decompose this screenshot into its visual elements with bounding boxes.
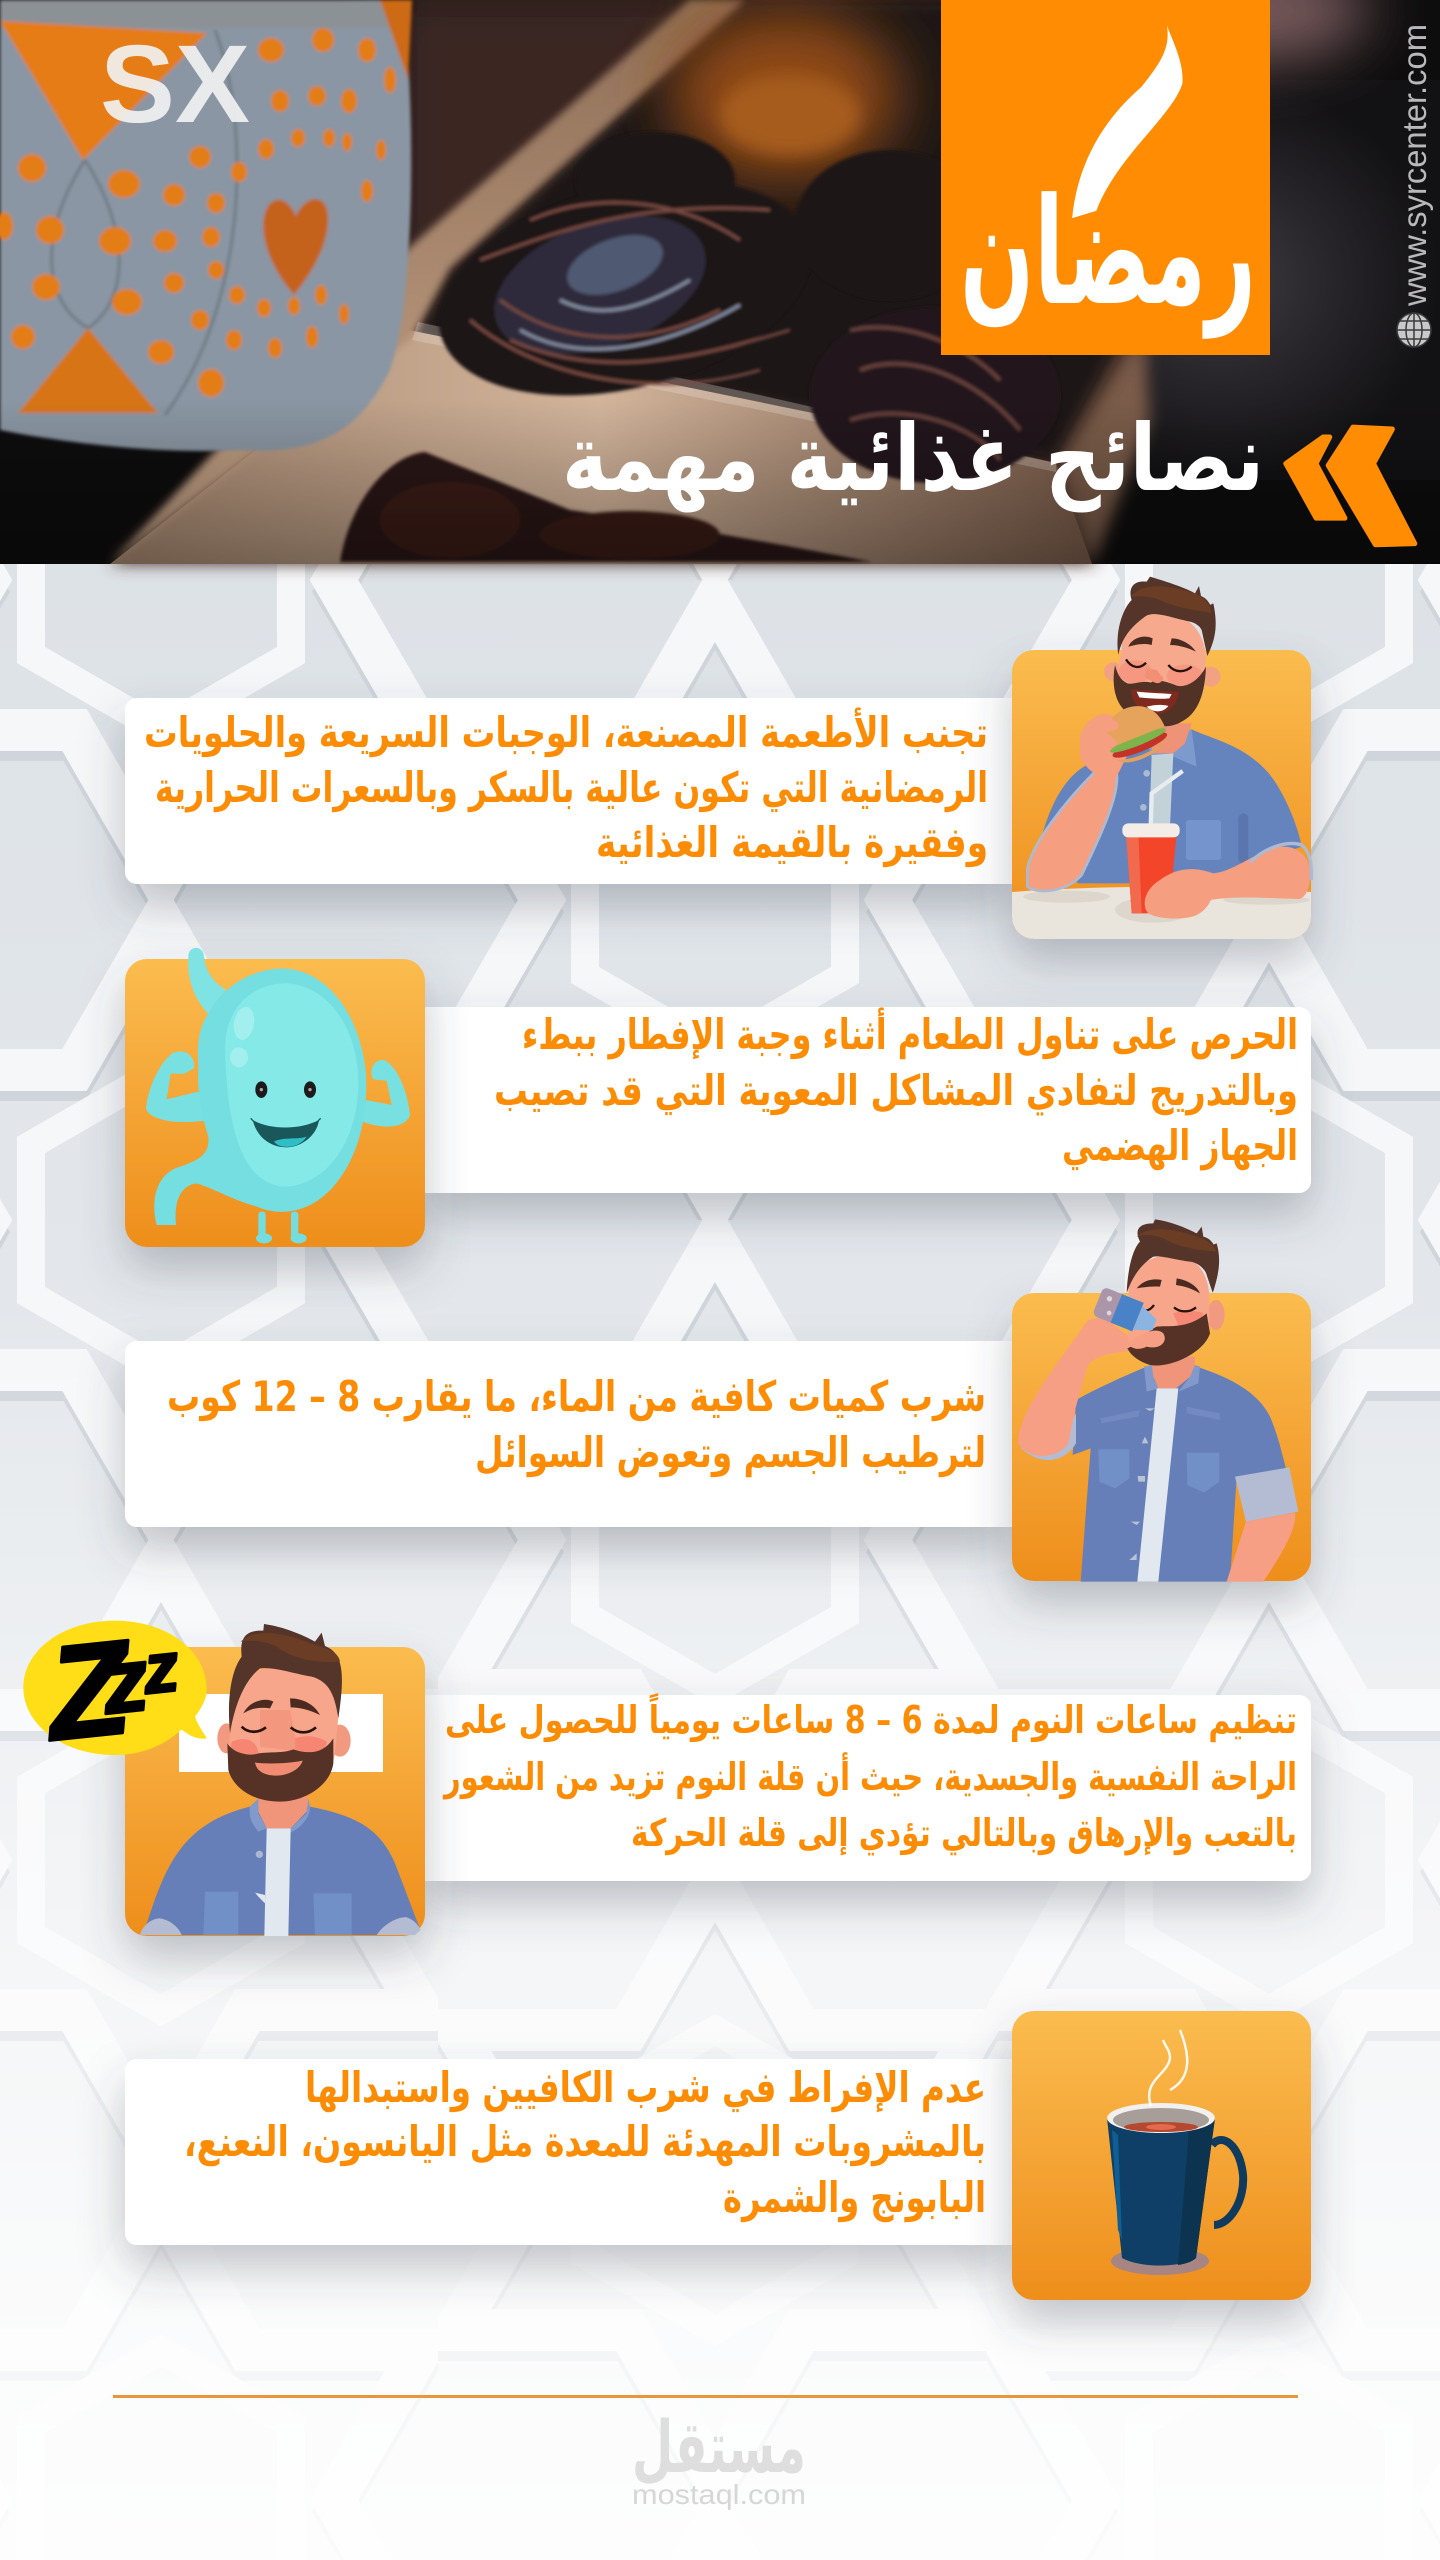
icon: chevrons: [1286, 427, 1415, 545]
patterned background: [0, 564, 1440, 2560]
tip 3 text: لترطيب الجسم وتعوض السوائل: [475, 1428, 986, 1478]
tip 5 text: [184, 2063, 986, 2223]
text card 1: [125, 698, 1012, 884]
text card 4: [425, 1695, 1311, 1881]
man drinking water: [1018, 1219, 1298, 1582]
man sleeping: [140, 1624, 421, 1936]
head: [1207, 1300, 1225, 1330]
straw: [1151, 771, 1183, 828]
divider line: [113, 2395, 1298, 2398]
raised arm: [1019, 1413, 1076, 1460]
icon: mug with steam: [1107, 2030, 1243, 2275]
shirt: [1039, 729, 1302, 883]
Ramadan word: رمضان: [960, 166, 1256, 339]
bottle: [1092, 1287, 1161, 1338]
Ramadan logo panel: [941, 0, 1270, 355]
tip 1 text: تجنب الأطعمة المصنعة، الوجبات السريعة والحلويات: [144, 707, 988, 758]
neck: [1152, 1357, 1195, 1388]
tip 1 text: [144, 707, 988, 868]
text card 3: [125, 1341, 1012, 1527]
panel: tip 5 limit caffeine: [125, 2011, 1311, 2300]
neck: [1152, 723, 1192, 753]
image card 3: [1012, 1293, 1311, 1581]
right arm and hand: [1210, 847, 1310, 900]
tip 1 text: وفقيرة بالقيمة الغذائية: [596, 818, 988, 868]
mostaql url: mostaql.com: [632, 2479, 806, 2510]
stomach character: [146, 948, 410, 1243]
fingers: [1127, 1331, 1165, 1349]
footer logo: [632, 2405, 806, 2510]
tee: [1137, 1388, 1178, 1582]
raised arm: [1027, 772, 1117, 891]
tip 4 text: تنظيم ساعات النوم لمدة 6 – 8 ساعات يومياً للحصول على: [445, 1693, 1297, 1743]
neck: [258, 1797, 308, 1828]
tip 3 text: [167, 1372, 986, 1478]
tip 1 text: الرمضانية التي تكون عالية بالسكر وبالسعرات الحرارية: [155, 763, 988, 813]
ceramic tray: [110, 0, 1150, 564]
tip 2 text: الجهاز الهضمي: [1062, 1121, 1298, 1171]
image card 5: [1012, 2011, 1311, 2300]
Zzz text: z: [97, 1630, 153, 1734]
panel: tip 4 sleep: [23, 1607, 1311, 1936]
tip 4 text: [442, 1693, 1297, 1856]
red cup: [1126, 833, 1177, 913]
shirt: [1073, 1367, 1287, 1582]
tip 2 text: [494, 1007, 1298, 1171]
arm cuff: [1235, 1467, 1298, 1522]
mostaql arabic wordmark: مستقل: [632, 2405, 806, 2489]
title: نصائح غذائية مهمة: [562, 405, 1264, 513]
tip 5 text: عدم الإفراط في شرب الكافيين واستبدالها: [305, 2063, 986, 2113]
website url: www.syrcenter.com: [1396, 24, 1433, 307]
tee: [1149, 753, 1173, 827]
lantern: [0, 0, 412, 451]
image card 4: [125, 1647, 425, 1936]
tip 5 text: البابونج والشمرة: [723, 2173, 986, 2223]
icon: globe: [1397, 313, 1431, 347]
calligraphic flourish: [1072, 25, 1183, 218]
burger: [1097, 697, 1173, 769]
SX logo: SX: [100, 23, 250, 146]
raisins: [340, 452, 872, 562]
tip 3 text: شرب كميات كافية من الماء، ما يقارب 8 – 12 كوب: [167, 1372, 986, 1422]
table: [1012, 887, 1311, 939]
text card 2: [425, 1007, 1311, 1193]
header photo: lantern and dates: [0, 0, 1440, 564]
white panel behind head: [179, 1694, 383, 1772]
Zzz text: z: [138, 1627, 182, 1709]
fingers: [1080, 717, 1119, 761]
shirt: [142, 1807, 419, 1935]
head: [1104, 662, 1123, 681]
text card 5: [125, 2059, 1012, 2245]
tee: [264, 1828, 291, 1936]
panel: tip 2 eat slowly: [125, 948, 1311, 1247]
tip 5 text: بالمشروبات المهدئة للمعدة مثل اليانسون، النعنع،: [184, 2117, 986, 2167]
man eating burger: [1023, 577, 1311, 923]
image card 2: [125, 959, 425, 1247]
almonds: [670, 10, 900, 180]
panel: tip 3 drink water: [125, 1219, 1311, 1582]
speech bubble Zzz: [23, 1607, 207, 1770]
Zzz text: Z: [36, 1612, 141, 1770]
dates: [416, 132, 1060, 483]
image card 1: [1012, 650, 1311, 939]
panel: tip 1 avoid processed food: [125, 577, 1311, 939]
head: [217, 1723, 236, 1753]
steam: [1149, 2030, 1187, 2106]
